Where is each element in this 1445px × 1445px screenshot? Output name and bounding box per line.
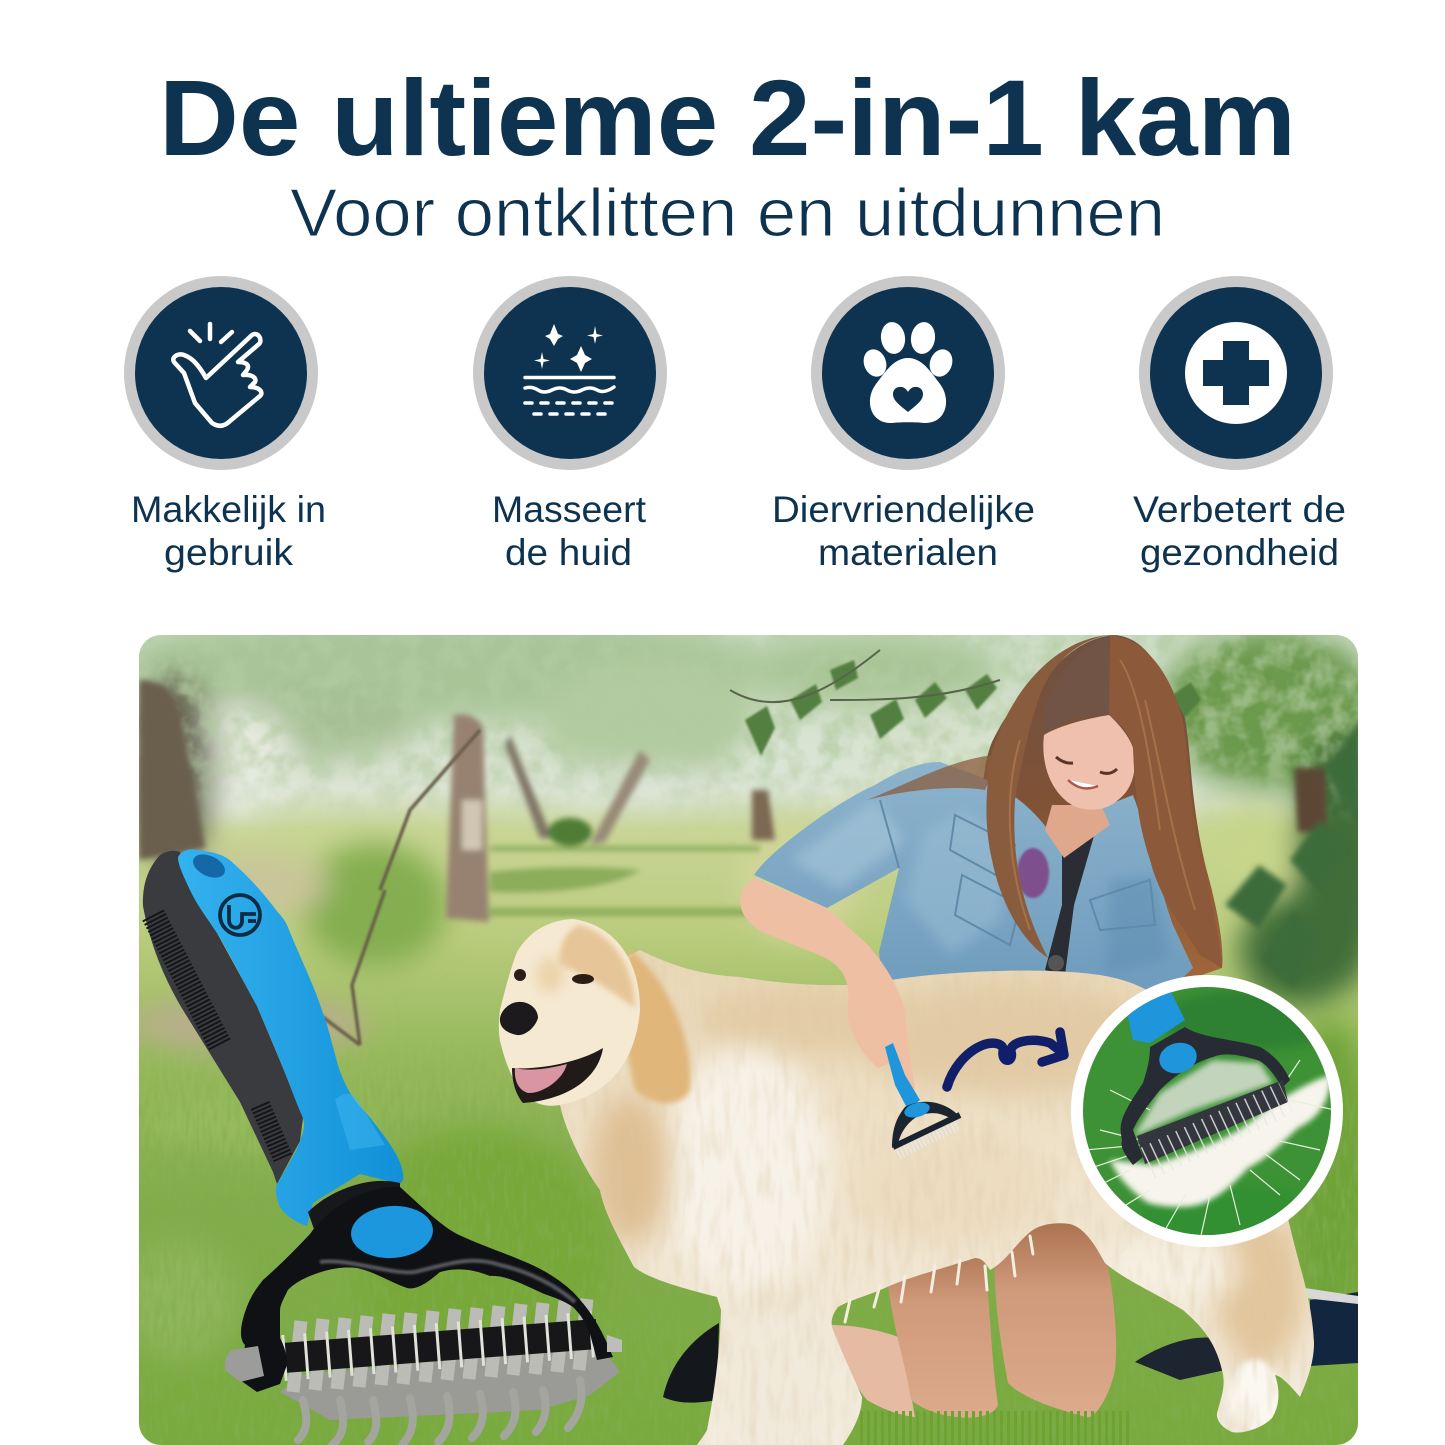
feature: improves health	[1133, 276, 1346, 573]
label: materialen	[818, 532, 998, 573]
jacket seams and pockets	[880, 800, 1155, 945]
lower blades	[280, 1345, 620, 1420]
label: gezondheid	[1140, 532, 1339, 573]
handle	[1127, 990, 1185, 1043]
icon: paw with heart	[811, 276, 1005, 470]
photo panel: woman grooming a golden retriever	[120, 610, 1385, 1445]
nose	[500, 1002, 538, 1035]
coil	[283, 1334, 597, 1358]
collar	[308, 1180, 400, 1229]
grass over knees	[860, 1411, 1130, 1445]
neck	[1045, 805, 1110, 858]
feature: massages the skin	[473, 276, 667, 573]
mouth and tongue	[512, 1048, 603, 1103]
logo	[220, 895, 260, 935]
hair back	[980, 635, 1223, 1000]
label: gebruik	[164, 532, 294, 573]
hair front	[986, 635, 1109, 958]
handle grip	[143, 851, 303, 1184]
icon: skin with sparkles	[473, 276, 667, 470]
legs	[830, 1325, 915, 1417]
background trees and lawn	[120, 610, 1385, 1445]
label: Verbetert de	[1133, 489, 1346, 530]
arm and hand over the dog	[740, 878, 915, 1095]
inset circle: comb removing loose fur	[1070, 970, 1350, 1250]
jacket	[754, 762, 1193, 990]
face	[1043, 715, 1135, 810]
teeth bar	[1137, 1080, 1288, 1164]
label: Makkelijk in	[131, 489, 326, 530]
dog	[499, 919, 1330, 1445]
loose fur	[1110, 1075, 1331, 1207]
bolts	[225, 1346, 264, 1382]
subtitle: Voor ontklitten en uitdunnen	[290, 175, 1165, 251]
title: De ultieme 2-in-1 kam	[159, 57, 1296, 178]
icon: snapping hand	[124, 276, 318, 470]
arrow to inset	[947, 1032, 1064, 1087]
handle body	[178, 849, 403, 1226]
label: Masseert	[492, 489, 647, 530]
ear	[625, 950, 691, 1103]
label: de huid	[505, 532, 632, 573]
blue button	[351, 1206, 433, 1258]
label: Diervriendelijke	[772, 489, 1035, 530]
feature: easy to use	[124, 276, 326, 573]
head frame	[240, 1187, 613, 1392]
grip ribs	[153, 915, 220, 1045]
head	[499, 919, 640, 1106]
small comb in hand	[885, 1043, 960, 1152]
feature: animal friendly materials	[772, 276, 1035, 573]
frame	[1121, 1027, 1290, 1165]
shoes and bag	[663, 1323, 719, 1403]
icon: medical cross	[1139, 276, 1333, 470]
rear blades	[293, 1299, 587, 1392]
woman	[663, 635, 1358, 1428]
large comb product shot	[143, 849, 622, 1445]
shirt and brooch	[1045, 836, 1094, 972]
